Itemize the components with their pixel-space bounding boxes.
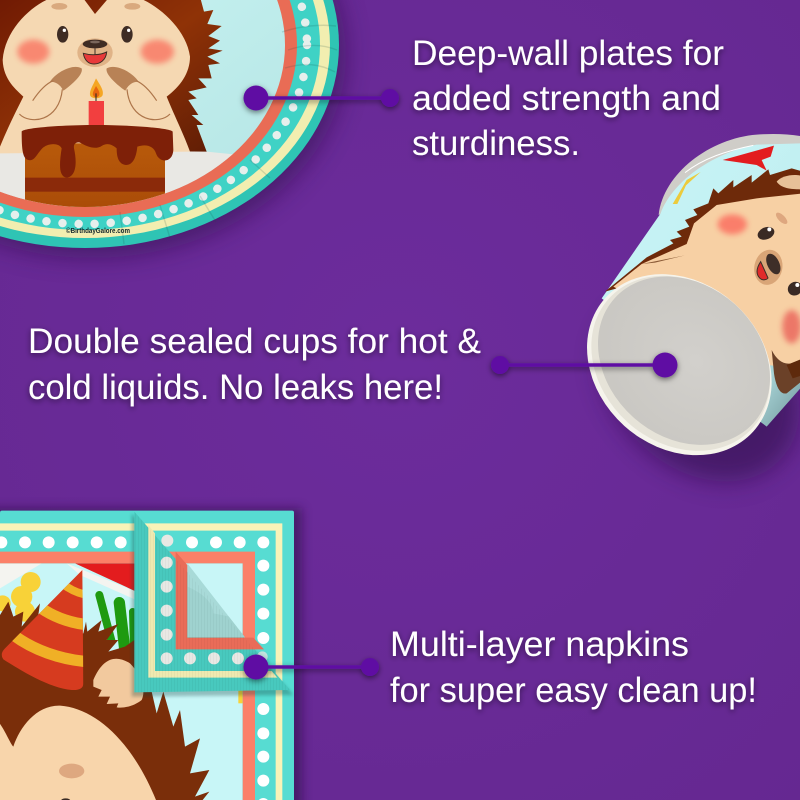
plate text: added strength and	[412, 79, 721, 118]
party hat tip	[723, 146, 774, 171]
napkin illustration	[0, 511, 294, 800]
eyebrows	[51, 3, 140, 10]
plate copyright text: ©BirthdayGalore.com	[66, 227, 130, 235]
plate rings	[0, 0, 339, 248]
hedgehog spiky hair	[0, 0, 223, 153]
hedgehog hair on cup	[605, 168, 800, 292]
sky	[0, 563, 243, 800]
callout: plates	[244, 34, 724, 163]
cheek right	[782, 310, 800, 343]
cup illustration	[550, 134, 800, 493]
flap rib texture	[134, 512, 290, 692]
hedgehog ear	[93, 659, 143, 708]
cup connector	[491, 352, 678, 378]
cup	[550, 134, 800, 521]
eyebrow	[59, 764, 84, 778]
cup bottom rim	[550, 237, 800, 493]
cup drop shadow	[562, 249, 800, 521]
cup text: Double sealed cups for hot &	[28, 322, 481, 361]
plate drop shadow	[0, 0, 346, 258]
hedgehog head	[0, 706, 157, 800]
eyes	[756, 225, 800, 298]
plate text: Deep-wall plates for	[412, 34, 724, 73]
muzzle	[751, 247, 786, 288]
cup body	[602, 143, 800, 427]
napkin text: Multi-layer napkins	[390, 625, 689, 664]
napkin folded flap	[132, 512, 293, 697]
flap shadow	[132, 513, 293, 697]
napkin picture	[0, 563, 243, 800]
cake	[22, 125, 174, 207]
hedgehog face on cup	[613, 193, 800, 370]
party hat	[2, 570, 84, 690]
ear	[777, 175, 800, 189]
plate connector	[244, 86, 399, 110]
cup text	[28, 322, 481, 407]
muzzle nose and mouth	[77, 38, 113, 67]
plate pleats	[120, 25, 337, 244]
cup inner floor	[564, 242, 800, 480]
right dots	[257, 560, 269, 800]
cream border	[0, 523, 282, 800]
plate text	[412, 34, 724, 163]
lower paw	[772, 350, 800, 394]
callout: cups	[28, 322, 678, 407]
napkin	[0, 508, 302, 800]
flap base	[134, 512, 290, 692]
cup text: cold liquids. No leaks here!	[28, 368, 443, 407]
cup rim cream shading	[556, 240, 800, 487]
flap coral band	[176, 552, 264, 649]
bunting	[0, 563, 42, 588]
white table	[0, 151, 233, 207]
arm crease	[642, 255, 685, 264]
yellow detail	[673, 172, 701, 204]
eye top	[61, 798, 70, 800]
yellow decoration	[0, 572, 243, 703]
eyes	[57, 26, 133, 43]
plate	[0, 0, 346, 267]
napkin text	[390, 625, 757, 710]
napkin text: for super easy clean up!	[390, 671, 757, 710]
candle	[89, 78, 104, 126]
eyebrow	[774, 211, 789, 226]
cup rim	[659, 134, 800, 215]
flap dots	[161, 535, 268, 664]
plate text: sturdiness.	[412, 124, 580, 163]
cheeks	[17, 40, 174, 64]
callout: napkins	[244, 625, 757, 710]
rim highlight	[685, 145, 753, 173]
hedgehog hair	[0, 602, 209, 800]
plate hedgehog illustration	[0, 0, 233, 207]
napkin shadow	[0, 508, 302, 800]
flap cream band	[148, 525, 277, 678]
coral border	[0, 552, 255, 800]
napkin connector	[244, 654, 379, 680]
flap inner pale panel	[187, 563, 247, 638]
cheek left	[718, 214, 747, 234]
hedgehog body and head	[0, 0, 190, 153]
top dots	[0, 536, 269, 548]
paws	[19, 67, 170, 120]
napkin base	[0, 511, 294, 800]
green plant	[99, 595, 134, 663]
